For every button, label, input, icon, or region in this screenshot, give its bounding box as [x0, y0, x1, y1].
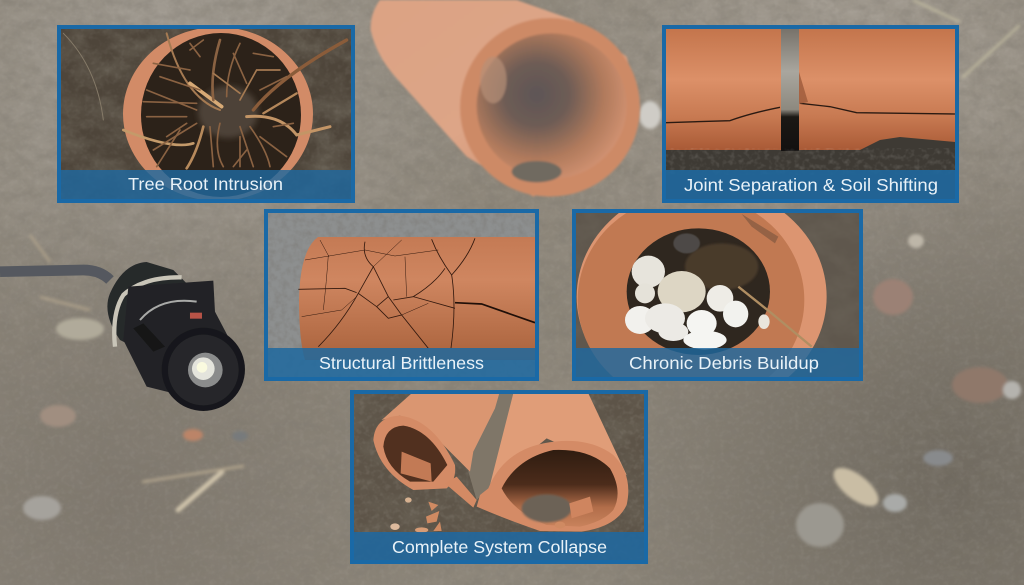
caption bar — [61, 170, 351, 199]
panel: Structural Brittleness — [266, 211, 537, 379]
background clay pipe — [371, 0, 640, 197]
caption: Chronic Debris Buildup — [629, 353, 819, 373]
caption bar — [268, 348, 535, 377]
caption: Tree Root Intrusion — [128, 174, 283, 194]
crack lines — [298, 238, 535, 348]
rubble — [390, 497, 565, 533]
panel: Joint Separation & Soil Shifting — [664, 27, 957, 201]
panel: Chronic Debris Buildup — [572, 209, 863, 381]
caption: Joint Separation & Soil Shifting — [684, 175, 938, 195]
rubble strip between the pipes — [468, 393, 515, 500]
debris: root strand — [738, 287, 812, 347]
ground soil — [666, 140, 955, 200]
caption: Structural Brittleness — [319, 353, 484, 373]
ground — [576, 213, 859, 377]
debris: white wipes — [625, 256, 770, 349]
broken right pipe — [477, 393, 628, 532]
caption bar — [666, 170, 955, 199]
broken left pipe — [373, 393, 499, 508]
soil — [354, 394, 644, 532]
pipe rim with roots — [63, 27, 347, 201]
panel: Tree Root Intrusion — [59, 27, 353, 201]
panel: Complete System Collapse — [352, 392, 646, 562]
caption bar — [354, 532, 644, 560]
pipe segments — [666, 29, 955, 151]
caption bar — [576, 348, 859, 377]
cracks — [666, 103, 955, 123]
grey background — [268, 213, 535, 348]
cracked pipe — [299, 237, 535, 360]
camera cable — [0, 270, 110, 280]
soil background — [61, 29, 351, 199]
pipe opening — [576, 213, 827, 377]
caption: Complete System Collapse — [392, 537, 607, 557]
camera: pipe inspection camera — [0, 262, 245, 411]
